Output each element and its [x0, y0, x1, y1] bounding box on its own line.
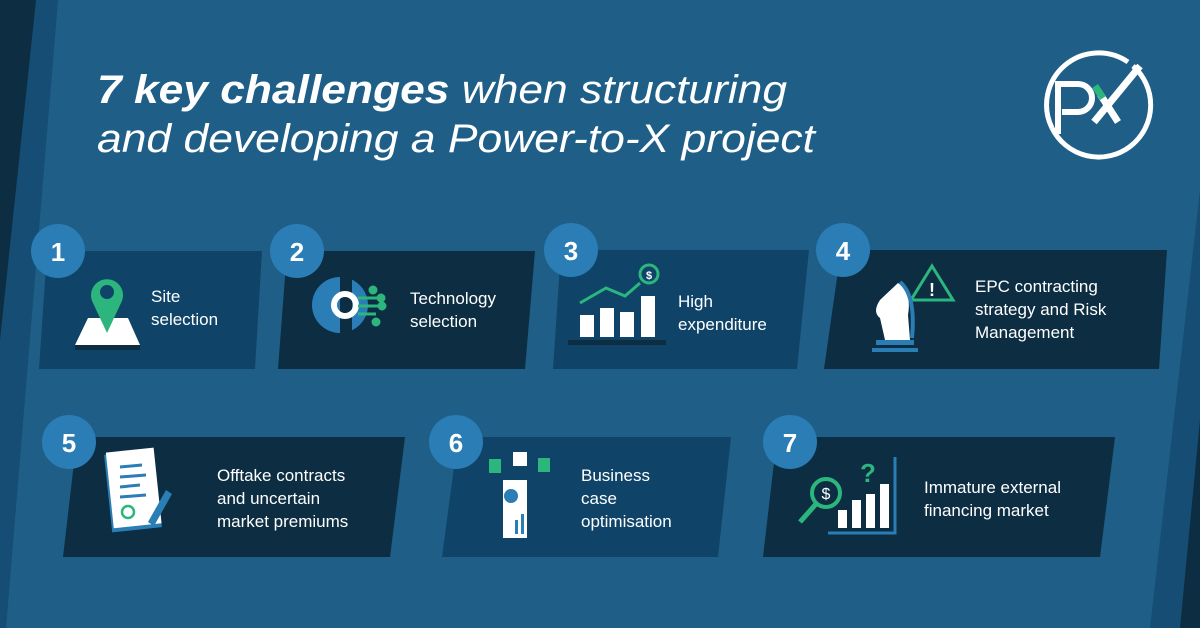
circle 6: 6: [449, 428, 463, 458]
panel 4: EPC contracting: strategy and Risk: [975, 300, 1107, 319]
icon: chess knight with warning: [872, 266, 953, 352]
circle 7: 7: [783, 428, 797, 458]
panel 6: business case: optimisation: [581, 512, 672, 531]
icon: contract: [104, 448, 172, 532]
panel 5: offtake contracts: [63, 437, 405, 557]
circle 3: [544, 223, 598, 277]
panel 4: EPC contracting: Management: [975, 323, 1075, 342]
panel 1: site selection: Site: [151, 287, 180, 306]
panel 3: high expenditure: expenditure: [678, 315, 767, 334]
icon: gear: [312, 270, 385, 340]
icon: map pin: [75, 279, 140, 350]
panel 2: technology selection: [278, 251, 535, 369]
icon: bar chart with dollar: $: [646, 270, 652, 282]
panel 5: offtake contracts: Offtake contracts: [217, 466, 345, 485]
circle 2: [270, 224, 324, 278]
panel 7: immature financing: [763, 437, 1115, 557]
circle 3: 3: [564, 236, 578, 266]
circle 6: [429, 415, 483, 469]
icon: magnifier with bars: ?: [860, 458, 876, 488]
icon: magnifier with bars: $: [822, 486, 831, 503]
icon: bar chart with dollar: [568, 265, 666, 345]
circle 7: [763, 415, 817, 469]
panel 6: business case: [442, 437, 731, 557]
panel 1: site selection: [39, 251, 262, 369]
panel 7: immature financing: Immature external: [924, 478, 1061, 497]
panel 6: business case: Business: [581, 466, 650, 485]
panel 7: immature financing: financing market: [924, 501, 1049, 520]
panel 1: site selection: selection: [151, 310, 218, 329]
panel 5: offtake contracts: and uncertain: [217, 489, 320, 508]
title: 7 key challenges when structuring: [97, 68, 787, 112]
circle 5: [42, 415, 96, 469]
icon: chess knight with warning: !: [929, 280, 935, 300]
panel 3: high expenditure: [553, 250, 809, 369]
icon: magnifier with bars: [800, 457, 895, 533]
circle 4: 4: [836, 236, 851, 266]
panel 3: high expenditure: High: [678, 292, 713, 311]
panel 2: technology selection: selection: [410, 312, 477, 331]
circle 5: 5: [62, 428, 76, 458]
title: and developing a Power-to-X project: [97, 117, 817, 161]
panel 6: business case: case: [581, 489, 617, 508]
panel 4: EPC contracting: [824, 250, 1167, 369]
circle 4: [816, 223, 870, 277]
circle 1: 1: [51, 237, 65, 267]
title: [97, 68, 817, 161]
panel 2: technology selection: Technology: [410, 289, 497, 308]
icon: dashboard: [489, 452, 550, 538]
panel 5: offtake contracts: market premiums: [217, 512, 348, 531]
circle 2: 2: [290, 237, 304, 267]
circle 1: [31, 224, 85, 278]
logo: PX: [1047, 53, 1151, 157]
panel 4: EPC contracting: EPC contracting: [975, 277, 1098, 296]
